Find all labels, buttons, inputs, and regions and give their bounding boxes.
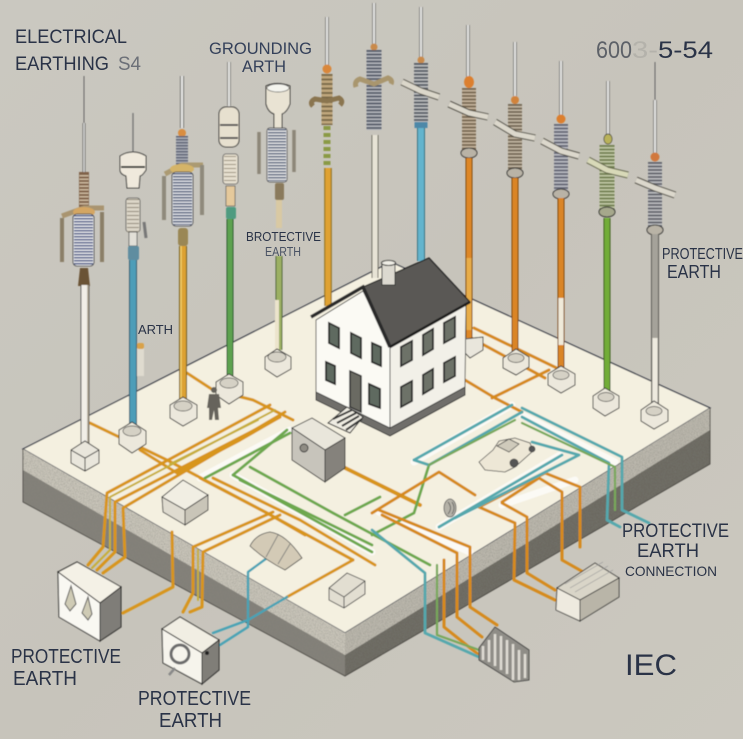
white wire channels bbox=[200, 405, 615, 552]
label: standard number: 600 bbox=[596, 37, 632, 64]
label: standard number bbox=[596, 37, 713, 64]
base 13 bbox=[641, 401, 668, 429]
label: protective earth, lower left: EARTH bbox=[13, 668, 77, 690]
pole 3: orange-yellow pole with coil bbox=[164, 76, 203, 426]
base 9 bbox=[464, 337, 483, 358]
house roof bbox=[311, 258, 470, 347]
crate box, right bbox=[556, 562, 619, 621]
blue and teal feeder bbox=[213, 558, 287, 645]
label: protective earth, centre: BROTECTIVE bbox=[246, 229, 321, 244]
label: protective earth, lower middle: PROTECTIVE bbox=[138, 688, 251, 710]
pole 4: green pole with cap bbox=[216, 62, 243, 404]
base 12 bbox=[593, 388, 619, 416]
small block, right of device bbox=[329, 573, 365, 608]
pole 9: orange pole with cross arm bbox=[449, 25, 488, 358]
house windows, left wall bbox=[326, 323, 381, 408]
green wires, left and centre bbox=[205, 430, 430, 565]
label: grounding earth: ARTH bbox=[242, 57, 286, 76]
house windows, right wall bbox=[401, 317, 455, 407]
orange wires, lower right bbox=[372, 328, 585, 655]
base 2 bbox=[119, 422, 146, 453]
junction box, centre bbox=[292, 418, 345, 482]
orange trunk wires, left bbox=[88, 373, 420, 613]
pole 6: yellow pole with fitting bbox=[311, 17, 342, 306]
label: protective earth, centre bbox=[246, 229, 321, 259]
blue and green wires, right bbox=[372, 405, 649, 657]
base 3 bbox=[170, 397, 197, 426]
base 10 bbox=[503, 349, 529, 375]
junction box, small left bbox=[162, 480, 208, 525]
label: protective earth connection bbox=[622, 521, 729, 579]
label: protective earth, right: EARTH bbox=[667, 262, 721, 282]
person figure bbox=[207, 387, 221, 420]
socket box, left bbox=[58, 562, 121, 641]
label: protective earth, centre: EARTH bbox=[265, 244, 301, 259]
base 11 bbox=[548, 366, 575, 393]
pole 7: white pole with coil bbox=[356, 3, 392, 278]
small spool device on slab bbox=[444, 499, 456, 517]
dial box, lower bbox=[162, 617, 219, 684]
house door bbox=[350, 371, 361, 412]
label: protective earth connection: CONNECTION bbox=[625, 563, 717, 579]
label: standard number: 5-54 bbox=[658, 37, 713, 64]
title: electrical earthing: S4 bbox=[118, 54, 141, 75]
house foundation bbox=[316, 387, 465, 436]
platform: concrete slab bbox=[23, 262, 710, 676]
pole 2: blue pole with cap bbox=[119, 113, 146, 453]
coil connector, bottom bbox=[479, 627, 529, 682]
house steps bbox=[328, 407, 363, 433]
pole 11: orange and white pole with cross arm bbox=[542, 61, 579, 393]
label: protective earth connection: EARTH bbox=[637, 541, 699, 562]
pole 12: green pole with cross arm bbox=[588, 81, 628, 416]
label: standard number: 3- bbox=[632, 37, 658, 64]
pole 10: orange pole with cross arm bbox=[495, 42, 535, 375]
label: earth near pole 2: ARTH bbox=[138, 322, 173, 337]
pole 5: cream and green pole bbox=[259, 84, 294, 377]
wire network on slab and sides bbox=[88, 328, 649, 657]
label: protective earth, right bbox=[662, 246, 743, 282]
label: protective earth connection: PROTECTIVE bbox=[622, 521, 729, 542]
base 4 bbox=[216, 374, 243, 404]
label: grounding earth bbox=[209, 39, 312, 76]
house left gable wall bbox=[316, 291, 390, 428]
title: electrical earthing: EARTHING bbox=[15, 54, 109, 75]
house right wall bbox=[390, 305, 466, 428]
base 5 bbox=[265, 349, 291, 377]
base 1 bbox=[71, 441, 99, 471]
pole 13: grey pole with cross arm bbox=[636, 62, 675, 429]
small post beside pole 2 bbox=[137, 343, 144, 376]
pole 8: blue pole with cross arm bbox=[402, 7, 439, 261]
yellow accents bbox=[92, 410, 275, 600]
label: IEC: IEC bbox=[625, 649, 677, 682]
title: electrical earthing: ELECTRICAL bbox=[15, 27, 127, 48]
pole 1: white pole with coil bbox=[62, 76, 104, 471]
label: protective earth, lower left bbox=[11, 646, 121, 690]
label: protective earth, lower left: PROTECTIVE bbox=[11, 646, 121, 668]
house chimney bbox=[382, 260, 396, 285]
label: protective earth, lower middle: EARTH bbox=[159, 710, 222, 732]
house bbox=[311, 258, 470, 436]
title: electrical earthing bbox=[15, 27, 141, 75]
label: protective earth, lower middle bbox=[138, 688, 251, 732]
label: grounding earth: GROUNDING bbox=[209, 39, 312, 58]
car on slab bbox=[479, 438, 535, 472]
mouse-shaped device bbox=[250, 532, 302, 570]
